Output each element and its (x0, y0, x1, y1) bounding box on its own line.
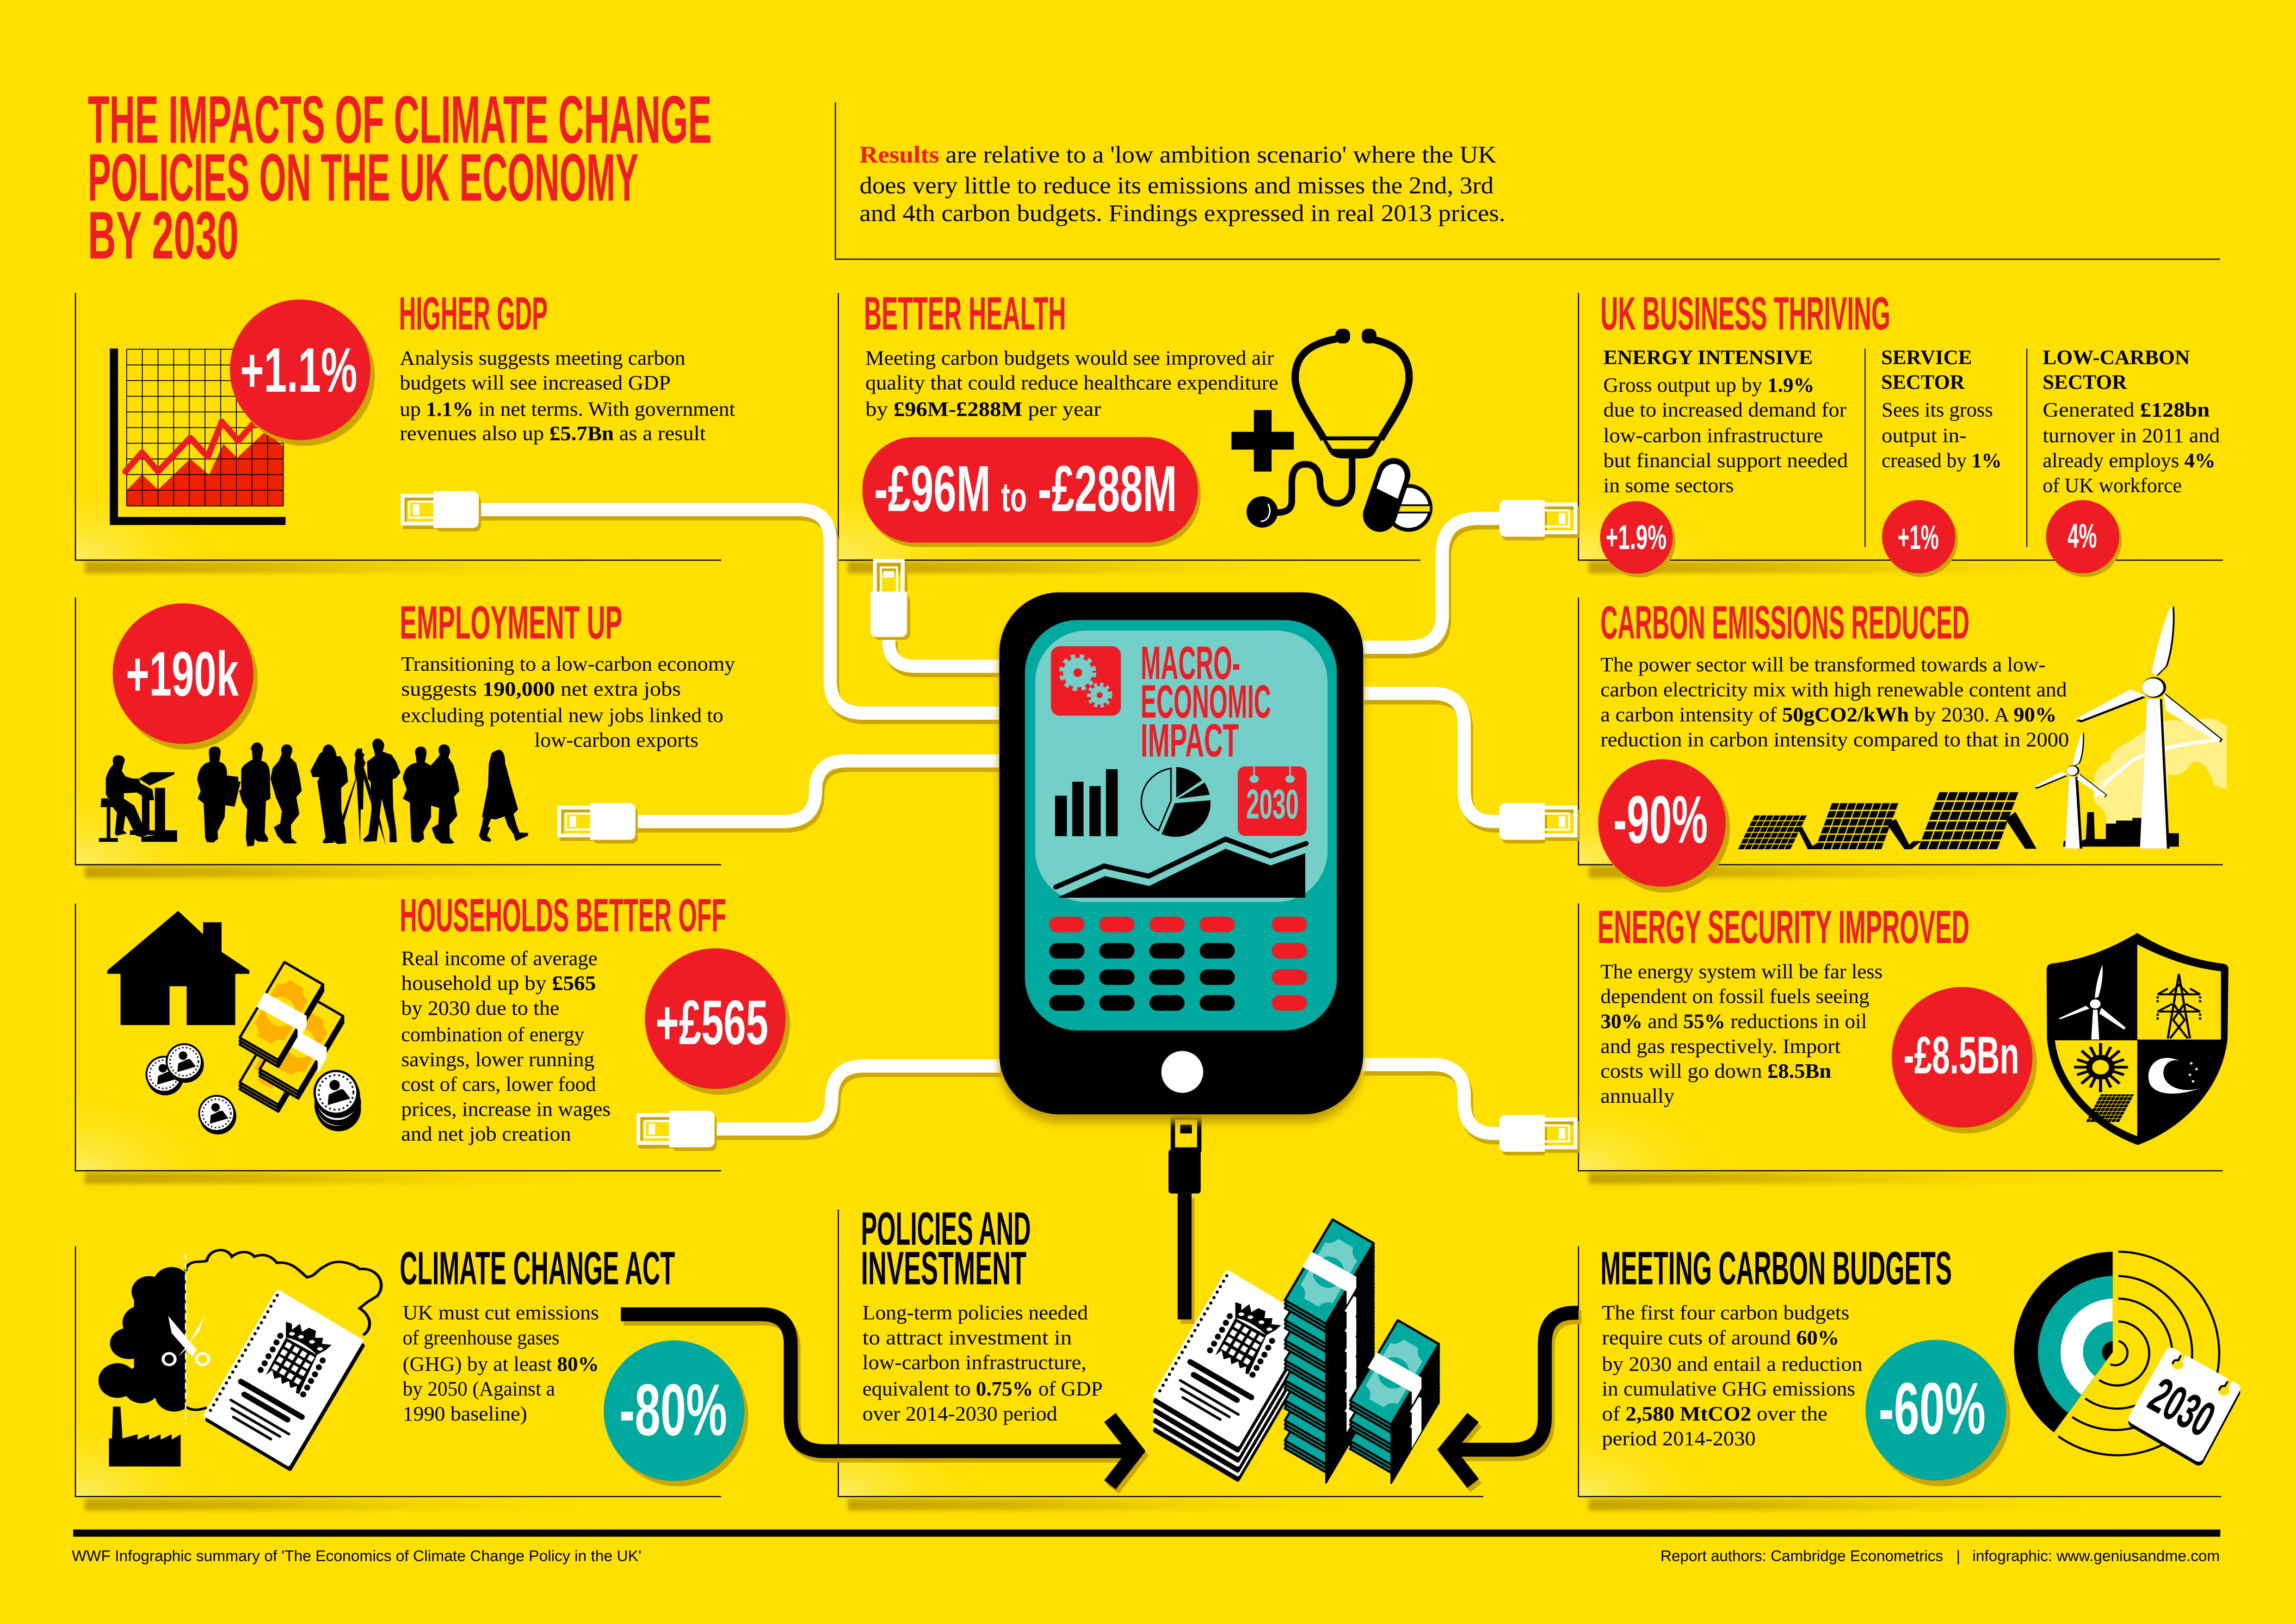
panel: climate change act (99, 1242, 748, 1486)
column: low-carbon sector: Generated £128bn (2043, 399, 2210, 421)
badge: +190k: +190k (126, 639, 239, 709)
text: meeting carbon budgets (1602, 1301, 1863, 1450)
title: THE IMPACTS OF CLIMATE CHANGE (88, 82, 712, 157)
text: employment up: excluding potential new jobs linked to (401, 704, 723, 727)
text: climate change act: 1990 baseline) (403, 1402, 527, 1425)
footer right credit: | (1957, 1548, 1960, 1565)
badge: +1.1%: +1.1% (240, 335, 357, 405)
heading: macro-economic impact: IMPACT (1141, 715, 1239, 767)
icon: coins (147, 1044, 361, 1135)
text: policies: over 2014-2030 period (863, 1402, 1057, 1425)
badge: +£565: +£565 (655, 987, 768, 1057)
text: better health: Meeting carbon budgets would see improved air (865, 346, 1274, 369)
text: policies: low-carbon infrastructure, (863, 1351, 1086, 1374)
heading: energy security improved: ENERGY SECURITY IMPROVED (1598, 901, 1969, 953)
text: higher GDP: Analysis suggests meeting carbon (400, 346, 685, 369)
icon: 2030 calendar (2134, 1351, 2235, 1460)
text: households: cost of cars, lower food (401, 1073, 596, 1096)
column: energy intensive (1604, 346, 1848, 497)
badge: -£96M to -£288M (863, 437, 1201, 547)
text: employment up: low-carbon exports (535, 729, 698, 752)
icon: shield (2047, 933, 2228, 1145)
footer right credit: infographic: www.geniusandme.com (1972, 1548, 2220, 1565)
heading: macro-economic impact (1141, 637, 1271, 767)
badge: +190k (113, 603, 258, 750)
badge: -£8.5Bn: -£8.5Bn (1904, 1026, 2019, 1085)
icon: pie chart (1142, 767, 1210, 837)
heading: policies and investment (861, 1203, 1031, 1294)
text: energy security: annually (1600, 1085, 1674, 1107)
intro text: does very little to reduce its emissions and misses the 2nd, 3rd (859, 172, 1494, 199)
panel: employment up (99, 596, 735, 846)
icon: 2030 calendar: 2030 (2140, 1367, 2224, 1447)
column: low-carbon sector: already employs 4% (2043, 449, 2216, 472)
column: low-carbon sector: SECTOR (2043, 371, 2127, 394)
title: BY 2030 (88, 198, 239, 273)
text: energy security: costs will go down £8.5Bn (1600, 1060, 1831, 1082)
column: energy intensive: Gross output up by 1.9% (1604, 374, 1814, 396)
heading: higher GDP: HIGHER GDP (399, 287, 548, 340)
icon: calendar 2030: 2030 (1246, 781, 1299, 828)
heading: policies and investment: INVESTMENT (861, 1242, 1026, 1294)
panel: energy security improved (1598, 901, 2228, 1145)
text: carbon emissions: carbon electricity mix with high renewable content and (1600, 678, 2067, 701)
footer left credit: WWF Infographic summary of 'The Economics of Climate Change Policy in the UK' (72, 1548, 642, 1565)
panel: higher GDP (110, 287, 735, 525)
icon: workers silhouettes (99, 739, 528, 846)
column: energy intensive: low-carbon infrastructure (1604, 424, 1823, 447)
icon: calendar 2030 (1238, 766, 1307, 836)
icon: GDP line chart (110, 349, 285, 525)
text: climate change act (403, 1301, 599, 1425)
badge: 4% (2046, 500, 2122, 577)
footer right credit: Report authors: Cambridge Econometrics (1660, 1548, 1943, 1565)
text: employment up: Transitioning to a low-carbon economy (401, 653, 735, 675)
icon: large money stack (1285, 1220, 1374, 1483)
badge: +1%: +1% (1898, 518, 1939, 556)
text: energy security: 30% and 55% reductions in oil (1600, 1010, 1867, 1032)
column: low-carbon sector (2043, 346, 2220, 497)
white data cables (479, 510, 1502, 1138)
text: policies (863, 1301, 1103, 1425)
heading: meeting carbon budgets: MEETING CARBON BUDGETS (1600, 1242, 1952, 1294)
text: households: and net job creation (401, 1123, 571, 1145)
footer rule (73, 1530, 2220, 1537)
panel: meeting carbon budgets (1600, 1242, 2235, 1486)
heading: UK business thriving: UK BUSINESS THRIVING (1600, 287, 1890, 340)
text: better health (865, 346, 1278, 420)
phone screen frame (1025, 620, 1337, 1031)
column: service sector: Sees its gross (1882, 399, 1993, 421)
text: better health: quality that could reduce healthcare expenditure (865, 371, 1278, 394)
keypad buttons (1049, 917, 1307, 1011)
central phone (1000, 593, 1363, 1123)
column: energy intensive: but financial support needed (1604, 449, 1848, 472)
phone display (1035, 630, 1327, 902)
column: service sector: creased by 1% (1882, 449, 2002, 472)
intro text: Results are relative to a 'low ambition scenario' where the UK (859, 141, 1497, 168)
text: households (401, 947, 611, 1145)
illustration: solar panels (1738, 790, 2037, 849)
intro text: and 4th carbon budgets. Findings expressed in real 2013 prices. (859, 200, 1505, 227)
black plug under phone (1168, 1118, 1201, 1193)
heading: macro-economic impact: MACRO- (1141, 637, 1240, 689)
badge: +£565 (645, 948, 790, 1095)
column: service sector (1881, 346, 2002, 472)
text: households: household up by £565 (401, 972, 596, 994)
text: households: prices, increase in wages (401, 1098, 611, 1120)
column: low-carbon sector: turnover in 2011 and (2043, 424, 2220, 447)
text: better health: by £96M-£288M per year (865, 398, 1101, 420)
text: higher GDP (400, 346, 735, 445)
badge: -80%: -80% (619, 1369, 727, 1451)
text: households: Real income of average (401, 947, 598, 969)
text: meeting carbon budgets: of 2,580 MtCO2 over the (1602, 1402, 1827, 1425)
icon: bar chart (1055, 769, 1117, 836)
text: higher GDP: revenues also up £5.7Bn as a result (400, 422, 706, 445)
badge: +1.9%: +1.9% (1606, 518, 1666, 556)
badge: -60%: -60% (1879, 1367, 1986, 1449)
text: climate change act: UK must cut emissions (403, 1301, 599, 1324)
text: meeting carbon budgets: in cumulative GHG emissions (1602, 1377, 1855, 1400)
icon: line chart on display (1056, 839, 1306, 898)
badge: -80% (604, 1340, 748, 1486)
icon: act document (206, 1292, 363, 1469)
text: energy security: The energy system will be far less (1600, 960, 1882, 983)
text: carbon emissions: reduction in carbon intensity compared to that in 2000 (1600, 728, 2069, 751)
icon: gears (1051, 646, 1121, 716)
title: POLICIES ON THE UK ECONOMY (88, 140, 638, 215)
text: climate change act: of greenhouse gases (403, 1326, 559, 1349)
footer right credit (1660, 1548, 2220, 1565)
text: higher GDP: up 1.1% in net terms. With government (400, 398, 735, 420)
heading: climate change act: CLIMATE CHANGE ACT (400, 1242, 675, 1294)
column: low-carbon sector: LOW-CARBON (2043, 346, 2190, 369)
column: low-carbon sector: of UK workforce (2043, 474, 2182, 497)
text: households: savings, lower running (401, 1048, 594, 1071)
text: employment up (401, 653, 735, 752)
icon: house (107, 911, 249, 1025)
text: policies: Long-term policies needed (863, 1301, 1088, 1324)
icon: policy document stack (1155, 1272, 1310, 1480)
text: meeting carbon budgets: by 2030 and entail a reduction (1602, 1352, 1863, 1375)
badge: -£96M to -£288M: -£288M (1038, 452, 1177, 525)
panel: better health (863, 287, 1431, 547)
panel: households better off (107, 889, 790, 1145)
heading: macro-economic impact: ECONOMIC (1141, 675, 1271, 728)
badge: 4%: 4% (2068, 517, 2097, 555)
text: households: by 2030 due to the (401, 997, 559, 1019)
badge: +1.1% (230, 299, 375, 446)
text: carbon emissions: a carbon intensity of 50gCO2/kWh by 2030. A 90% (1600, 704, 2056, 726)
text: climate change act: by 2050 (Against a (403, 1377, 555, 1400)
badge: -60% (1865, 1340, 2011, 1486)
text: meeting carbon budgets: The first four carbon budgets (1602, 1301, 1849, 1324)
text: energy security: and gas respectively. Import (1600, 1035, 1841, 1057)
badge: +1.9% (1600, 501, 1676, 577)
icon: target rings (2014, 1252, 2219, 1455)
panel: carbon emissions reduced (1598, 596, 2227, 893)
icon: cloud, factory and scissors (99, 1250, 381, 1466)
column: energy intensive: in some sectors (1604, 474, 1734, 497)
text: households: combination of energy (401, 1023, 584, 1046)
panel: policies and investment (861, 1203, 1439, 1483)
badge: -£96M to -£288M: to (1001, 474, 1027, 520)
text: meeting carbon budgets: period 2014-2030 (1602, 1427, 1756, 1450)
text: policies: equivalent to 0.75% of GDP (863, 1377, 1103, 1400)
text: carbon emissions (1600, 654, 2069, 751)
icon: small money stack (1350, 1320, 1439, 1483)
plug connectors (403, 491, 1578, 1155)
column: service sector: SERVICE (1881, 346, 1972, 369)
column: service sector: output in- (1882, 424, 1967, 447)
column: service sector: SECTOR (1881, 371, 1965, 394)
text: employment up: suggests 190,000 net extra jobs (401, 678, 681, 700)
text: policies: to attract investment in (863, 1326, 1072, 1349)
text: climate change act: (GHG) by at least 80% (403, 1352, 599, 1375)
intro text (859, 141, 1505, 227)
icon: stethoscope, cross and pills (1231, 329, 1431, 537)
text: meeting carbon budgets: require cuts of around 60% (1602, 1326, 1839, 1349)
text: carbon emissions: The power sector will be transformed towards a low- (1600, 654, 2046, 676)
column: energy intensive: ENERGY INTENSIVE (1604, 346, 1813, 369)
text: energy security: dependent on fossil fuels seeing (1600, 985, 1870, 1008)
badge: -90% (1598, 760, 1730, 893)
column: energy intensive: due to increased demand for (1604, 399, 1846, 421)
badge: -£96M to -£288M: -£96M (874, 452, 991, 525)
black input cable and arrows (621, 1193, 1581, 1489)
badge: +1% (1882, 500, 1958, 577)
title (88, 82, 712, 273)
icon: banknotes (240, 962, 343, 1111)
home button (1161, 1051, 1203, 1093)
illustration: smoke, factory, wind turbines (2035, 606, 2227, 849)
heading: households better off: HOUSEHOLDS BETTER OFF (400, 889, 726, 942)
text: energy security (1600, 960, 1882, 1107)
panel: UK business thriving (1600, 287, 2220, 577)
badge: -90%: -90% (1613, 782, 1708, 857)
badge: -£8.5Bn (1892, 987, 2037, 1133)
heading: better health: BETTER HEALTH (864, 287, 1066, 340)
heading: employment up: EMPLOYMENT UP (400, 596, 622, 648)
text: higher GDP: budgets will see increased GDP (400, 371, 671, 394)
heading: policies and investment: POLICIES AND (861, 1203, 1031, 1255)
